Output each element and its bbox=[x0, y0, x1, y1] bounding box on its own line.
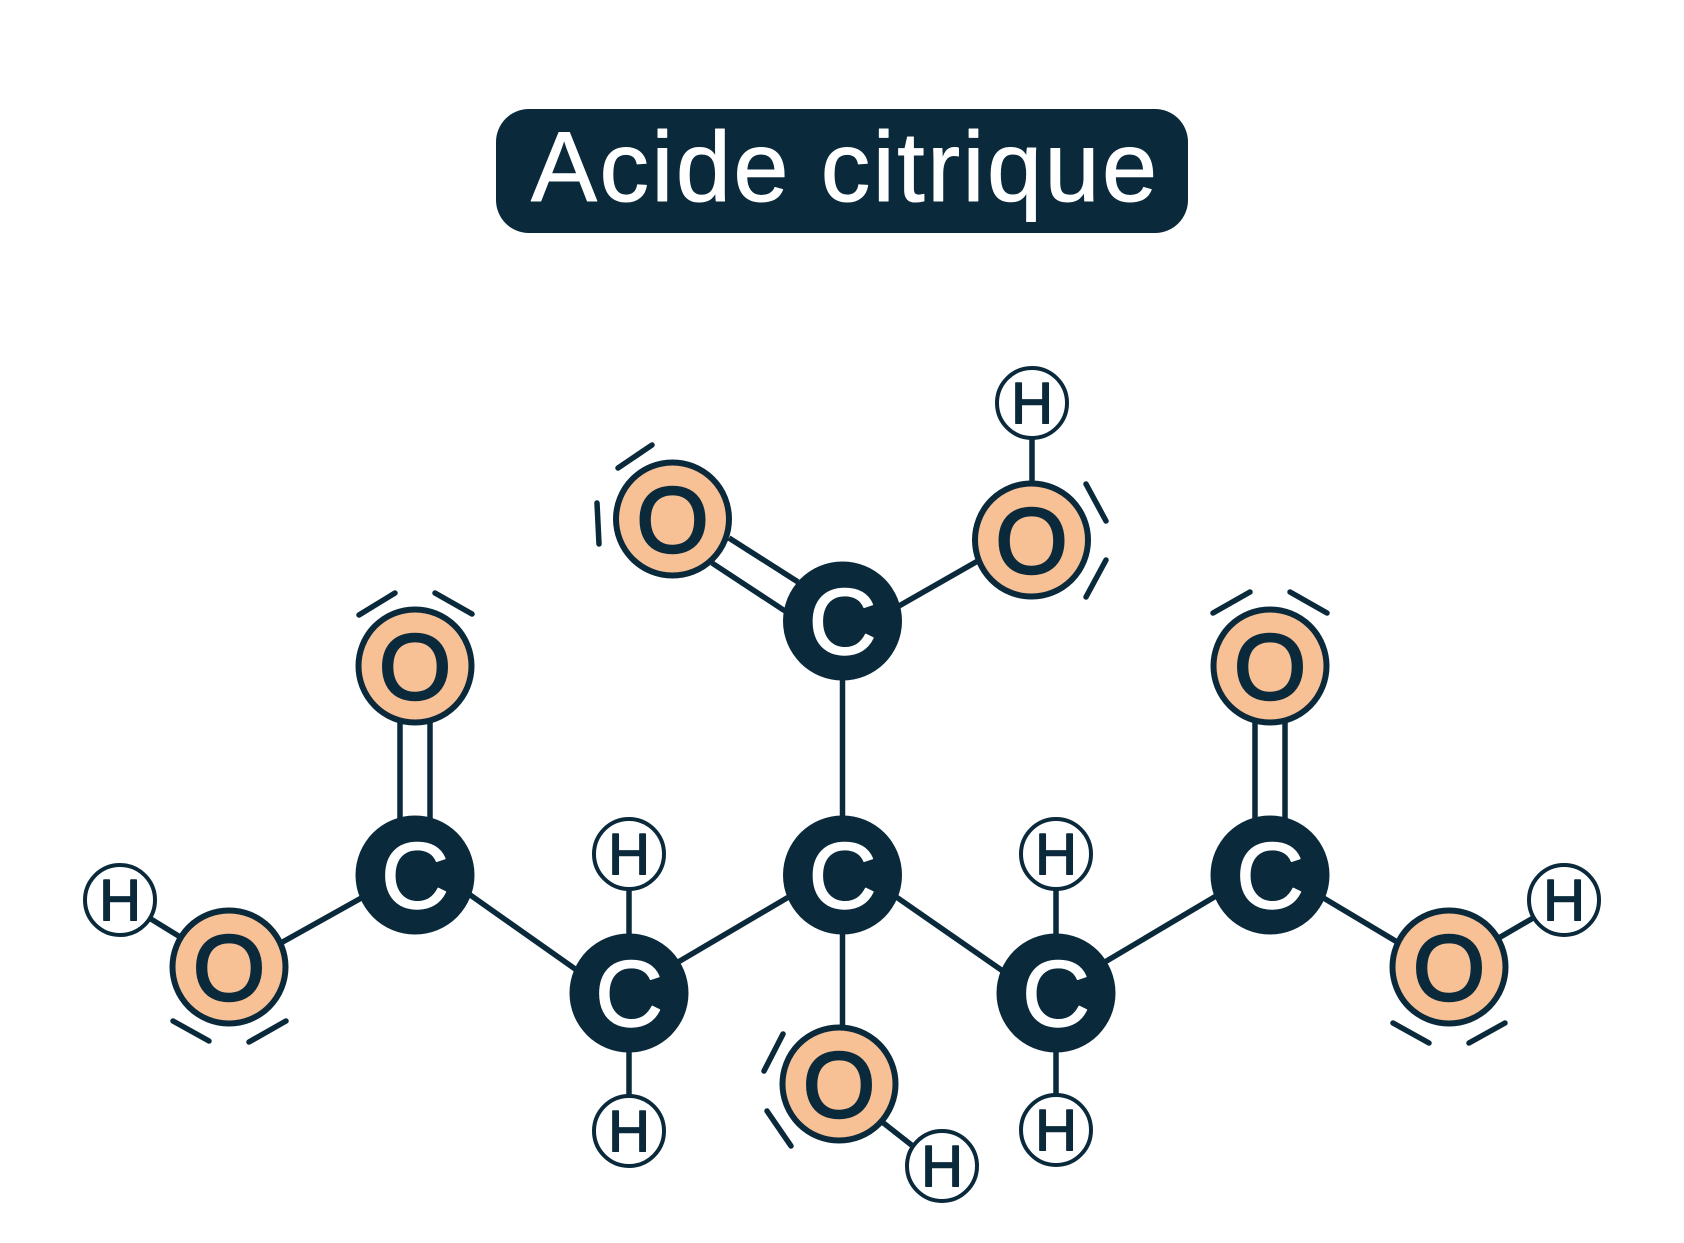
oxygen atoms: O bbox=[995, 489, 1068, 593]
hydrogen atoms: H bbox=[921, 1134, 963, 1199]
hydrogen atoms: H bbox=[608, 1099, 650, 1164]
lone pairs bbox=[173, 445, 1505, 1146]
oxygen atoms: O bbox=[379, 615, 451, 719]
hydrogen atoms: H bbox=[1543, 868, 1585, 933]
molecule: citric acid structure bbox=[85, 368, 1599, 1201]
carbon atoms: C bbox=[1236, 823, 1304, 928]
carbon atoms: C bbox=[381, 823, 449, 928]
hydrogen atoms: H bbox=[1035, 1098, 1077, 1163]
carbon atoms: C bbox=[809, 823, 876, 928]
bonds bbox=[120, 403, 1564, 1169]
oxygen atoms: O bbox=[1413, 916, 1485, 1020]
hydrogen atoms: H bbox=[1011, 371, 1053, 436]
hydrogen atoms: H bbox=[99, 868, 141, 933]
title: Acide citrique bbox=[531, 111, 1157, 222]
carbon atoms: C bbox=[595, 941, 663, 1046]
oxygen atoms: O bbox=[1234, 615, 1306, 719]
oxygen atoms: O bbox=[636, 468, 709, 572]
carbon atoms: C bbox=[809, 569, 876, 674]
oxygen atoms: O bbox=[193, 916, 265, 1020]
carbon atoms bbox=[356, 562, 1330, 1052]
oxygen atoms: O bbox=[803, 1033, 875, 1137]
hydrogen atoms: H bbox=[1035, 822, 1077, 887]
hydrogen atoms: H bbox=[608, 822, 650, 887]
carbon atoms: C bbox=[1022, 941, 1090, 1046]
oxygen atoms bbox=[172, 462, 1506, 1140]
hydrogen atoms bbox=[85, 368, 1599, 1201]
